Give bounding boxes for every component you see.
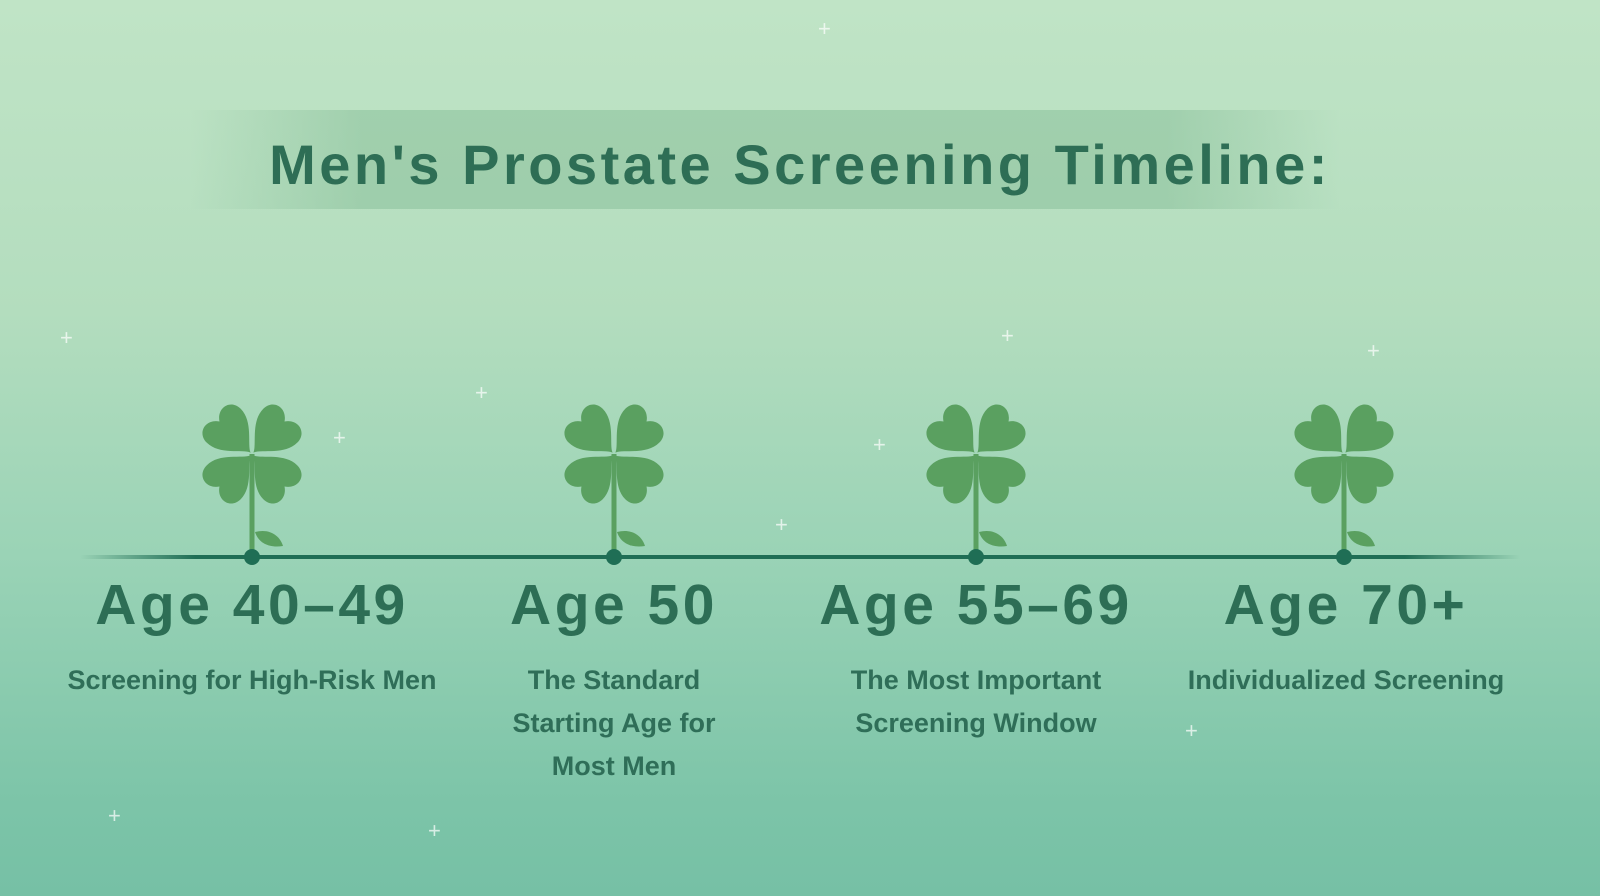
- description: Most Men: [552, 751, 676, 781]
- title band: [190, 110, 1340, 209]
- icon: clover: [1294, 404, 1394, 565]
- text: +: [60, 325, 73, 350]
- item: age 55-69: [819, 404, 1133, 738]
- icon: clover: [202, 404, 302, 565]
- description: The Most Important: [851, 665, 1101, 695]
- text: +: [873, 432, 886, 457]
- description: The Standard: [528, 665, 700, 695]
- description: Individualized Screening: [1188, 665, 1504, 695]
- item: age 50: [510, 404, 718, 781]
- text: +: [1185, 718, 1198, 743]
- text: +: [428, 818, 441, 843]
- age label: Age 40–49: [95, 573, 409, 637]
- text: +: [475, 380, 488, 405]
- description: [512, 665, 716, 781]
- text: +: [775, 512, 788, 537]
- icon: clover: [564, 404, 664, 565]
- description: Starting Age for: [512, 708, 716, 738]
- description: Screening Window: [855, 708, 1097, 738]
- item: age 70+: [1188, 404, 1504, 695]
- text: +: [1001, 323, 1014, 348]
- text: +: [333, 425, 346, 450]
- item: age 40-49: [67, 404, 437, 695]
- timeline line: [80, 555, 1520, 559]
- text: +: [818, 16, 831, 41]
- description: Screening for High-Risk Men: [67, 665, 437, 695]
- age label: Age 70+: [1224, 573, 1468, 637]
- age label: Age 55–69: [819, 573, 1133, 637]
- title: Men's Prostate Screening Timeline:: [269, 133, 1331, 196]
- text: +: [1367, 338, 1380, 363]
- age label: Age 50: [510, 573, 718, 637]
- description: [851, 665, 1101, 738]
- icon: clover: [926, 404, 1026, 565]
- text: +: [108, 803, 121, 828]
